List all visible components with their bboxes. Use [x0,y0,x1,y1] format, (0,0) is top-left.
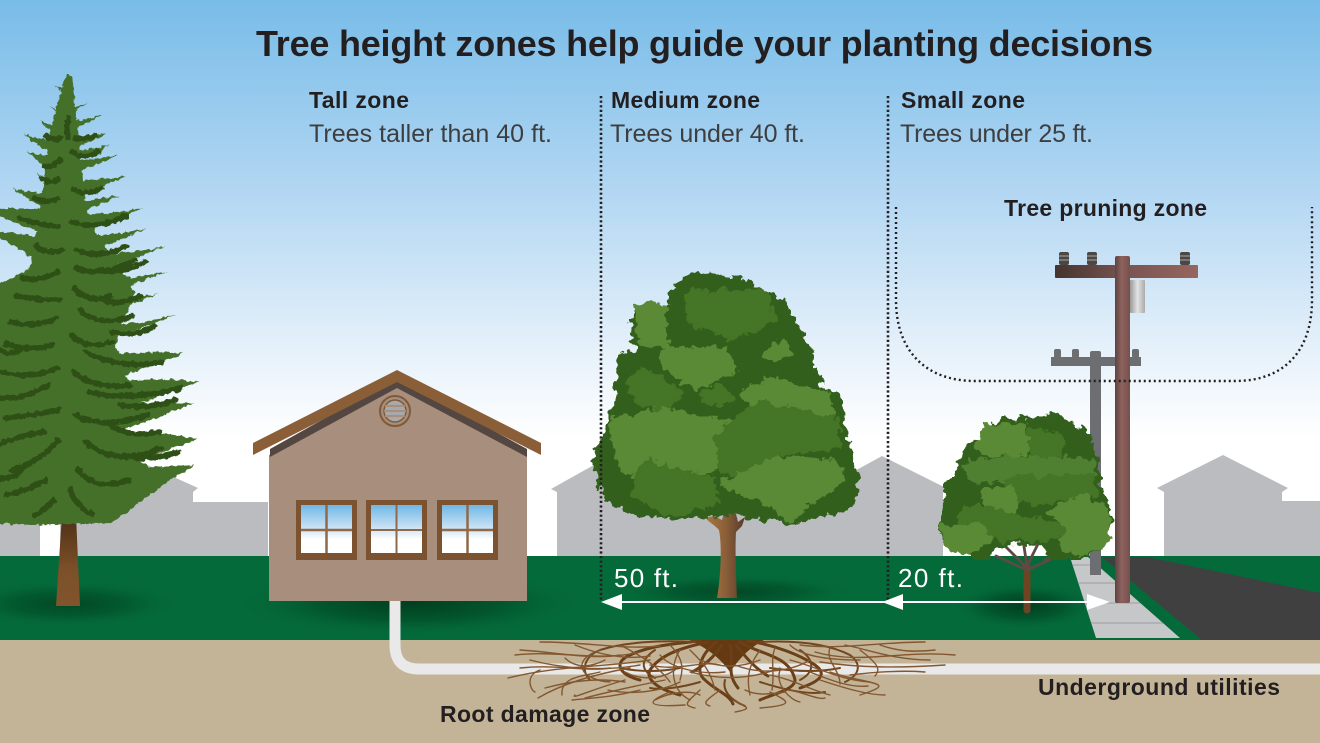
insulators [1059,252,1190,265]
soil [0,640,1320,743]
pole [1115,256,1130,603]
distance arrows [601,594,1110,610]
road [1102,557,1320,640]
small tree canopy [940,415,1113,563]
tall zone label: Tall zone [309,87,409,113]
medium tree [593,272,860,598]
small tree [940,415,1113,610]
tall zone label: Trees taller than 40 ft. [309,120,552,148]
gray utility pole [1051,349,1141,575]
background house silhouettes [0,455,1320,556]
tree pruning zone dotted boundary [896,207,1312,381]
window left [296,500,357,560]
brown utility pole [1055,252,1198,603]
pine tree (tall zone) [0,75,200,606]
small zone label: Trees under 25 ft. [900,120,1093,148]
house [253,370,541,601]
50 ft distance label: 50 ft. [614,563,678,593]
window middle [366,500,427,560]
window right [437,500,498,560]
medium tree trunk [706,512,745,598]
medium roots [585,641,858,706]
sidewalk [1070,557,1180,638]
tree roots [508,640,955,712]
zone divider: tall / medium [600,96,602,602]
zone divider: medium / small [887,96,889,602]
roof underside [270,378,527,457]
small zone label [900,87,1093,148]
fine roots [508,642,955,712]
medium zone label: Medium zone [611,87,760,113]
medium zone label [610,87,805,148]
underground utility pipe [395,601,1320,669]
small tree trunk and branches [996,540,1065,610]
ground shadows [0,569,1100,637]
pine trunk [56,515,80,606]
lawn [0,556,1320,640]
underground utilities label: Underground utilities [1038,674,1280,700]
root crown [690,640,764,672]
crossarm [1055,265,1198,278]
house wall [269,382,527,601]
20 ft distance label: 20 ft. [898,563,963,593]
small zone label: Small zone [901,87,1025,113]
title: Tree height zones help guide your planting decisions [256,23,1153,64]
pine foliage [0,75,200,525]
root damage zone label: Root damage zone [440,701,650,727]
medium tree canopy [593,272,860,523]
tall zone label [309,87,552,148]
medium zone label: Trees under 40 ft. [610,120,805,148]
transformer [1130,280,1145,313]
roof [253,370,541,455]
sky background [0,0,1320,556]
gable vent [380,396,410,426]
thick roots [620,641,821,704]
tree pruning zone label: Tree pruning zone [1004,195,1207,221]
pine needle shading [0,118,180,515]
